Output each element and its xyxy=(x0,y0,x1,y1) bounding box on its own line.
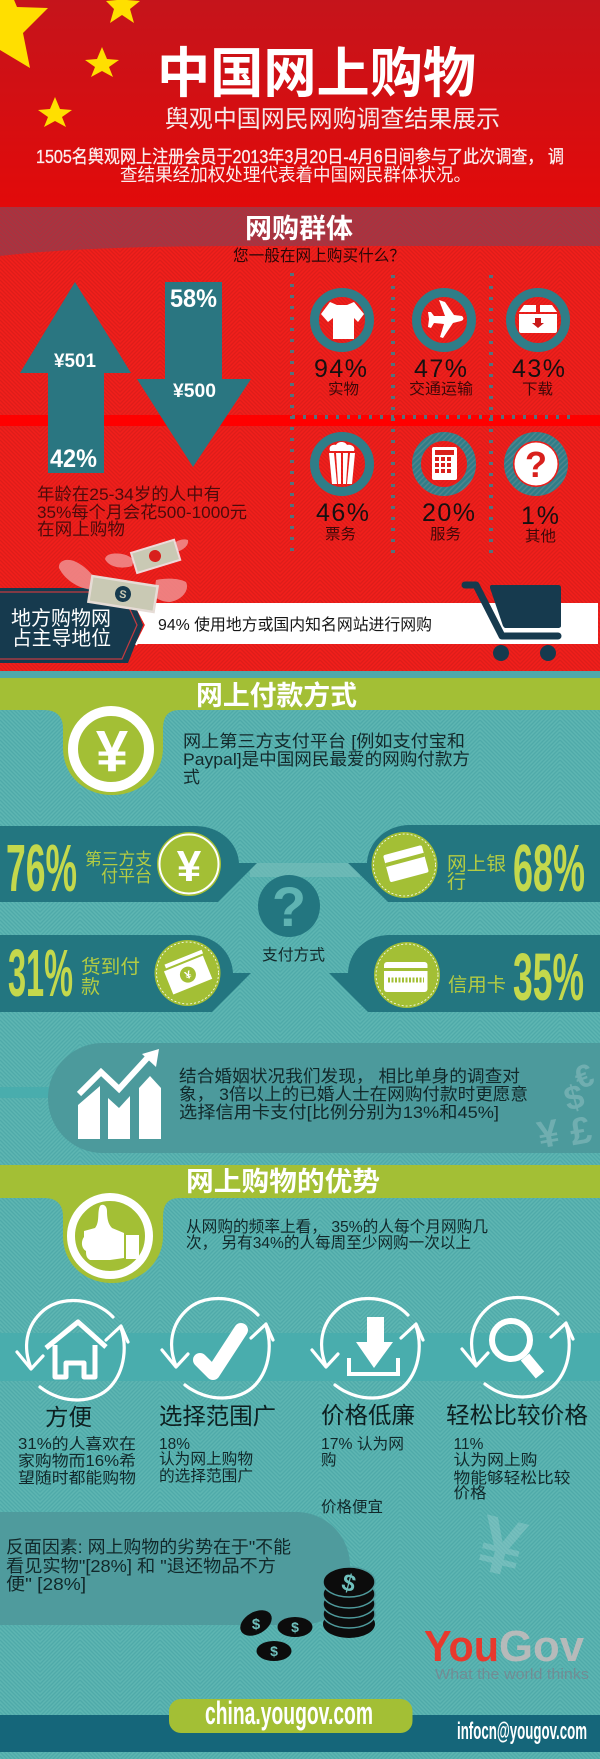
icon: flag stars xyxy=(0,0,140,127)
callout: 第三方支付平台 76%: 付平台 xyxy=(101,867,152,886)
banner: 地方购物网占主导地位: 占主导地位 xyxy=(12,627,111,650)
benefit: 轻松比较价格: 轻松比较价格 xyxy=(446,1402,588,1428)
logo: YouGov: Gov xyxy=(499,1622,585,1671)
payment intro text xyxy=(183,732,470,787)
callout: 信用卡 35%: 信用卡 xyxy=(448,974,506,996)
question text: 您一般在网上购买什么？ xyxy=(233,247,405,265)
text: frequency: 从网购的频率上看， 35%的人每个月网购几 xyxy=(186,1218,488,1236)
benefit: 轻松比较价格: 价格 xyxy=(454,1484,487,1502)
age text: 35%每个月会花500-1000元 xyxy=(37,503,247,522)
intro text: 查结果经加权处理代表着中国网民群体状况。 xyxy=(120,165,471,185)
callout: 网上银行 68%: 行 xyxy=(447,871,466,893)
white strip: 94% text: 94% 使用地方或国内知名网站进行网购 xyxy=(158,616,432,634)
age text: 在网上购物 xyxy=(37,520,125,539)
benefit: 价格低廉: 17% 认为网 xyxy=(321,1435,404,1453)
icon: large flying bill xyxy=(59,560,187,612)
item: 实物 94%: 94% xyxy=(314,355,367,383)
banner: 地方购物网占主导地位 xyxy=(0,588,146,663)
item: 下载 43%: 下载 xyxy=(522,381,553,398)
icon: loose coins xyxy=(236,1605,312,1661)
red section background xyxy=(0,207,600,671)
banner: 地方购物网占主导地位: 地方购物网 xyxy=(11,607,111,630)
panel: downside: 看见实物"[28%] 和 "退还物品不方 xyxy=(6,1556,276,1576)
section band: 网上付款方式 xyxy=(0,678,600,795)
callout: 信用卡 35% xyxy=(329,935,600,1015)
item: 其他 1%: ? xyxy=(525,444,547,485)
footer pill: china.yougov.com xyxy=(169,1695,412,1733)
item: 下载 43%: 43% xyxy=(512,355,565,383)
up arrow: ¥501 42%: ¥501 xyxy=(54,351,96,372)
callout: 货到付款 31%: 货到付 xyxy=(81,956,140,978)
item: 票务 46%: 票务 xyxy=(325,526,356,543)
icons: currency symbols: ¥ xyxy=(534,1112,562,1157)
item: 票务 46%: 46% xyxy=(316,499,369,527)
item: 交通运输 47%: 47% xyxy=(414,355,467,383)
section band: 网上购物的优势 xyxy=(0,1165,600,1283)
callout: 货到付款 31%: ¥ xyxy=(183,969,194,982)
benefit: 方便: 望随时都能购物 xyxy=(18,1469,136,1487)
icon: rising chart xyxy=(78,1049,161,1139)
text: marital: 选择信用卡支付[比例分别为13%和45%] xyxy=(179,1103,499,1122)
icon: coin stack: $ xyxy=(339,1569,359,1598)
red horizontal bar xyxy=(0,415,600,426)
teal page background xyxy=(0,671,600,1759)
item: 下载 43% xyxy=(510,292,566,398)
icon: thumbs up xyxy=(71,1197,149,1275)
label: 支付方式: 支付方式 xyxy=(262,946,325,964)
benefit: 选择范围广: 认为网上购物 xyxy=(159,1450,253,1468)
item: 实物 94%: 实物 xyxy=(328,381,359,398)
item: 其他 1% xyxy=(508,436,564,545)
icon: yen coin xyxy=(73,711,149,787)
panel: marital status xyxy=(48,1043,600,1157)
callout: 第三方支付平台 76% xyxy=(0,826,257,906)
panel: downside: 反面因素: 网上购物的劣势在于"不能 xyxy=(6,1537,291,1557)
icon: faint yen: ¥ xyxy=(469,1498,534,1595)
benefit: 价格低廉: 价格便宜 xyxy=(321,1498,383,1516)
white strip: 94% text xyxy=(135,603,598,644)
benefit: 方便: 方便 xyxy=(45,1404,92,1430)
teal divider xyxy=(0,671,600,678)
callout: 第三方支付平台 76%: ¥ xyxy=(177,842,202,891)
icons: currency symbols: $ xyxy=(560,1077,588,1119)
up arrow: ¥501 42% xyxy=(20,282,131,473)
item: 服务 20%: 服务 xyxy=(430,526,461,543)
item: 服务 20% xyxy=(416,436,475,543)
up arrow: ¥501 42%: 42% xyxy=(50,445,97,473)
item: 服务 20%: 20% xyxy=(422,499,475,527)
icon: payment question xyxy=(258,875,320,938)
heading: 网购群体: 网购群体 xyxy=(245,214,353,244)
subtitle: 舆观中国网民网购调查结果展示 xyxy=(165,106,500,133)
text: marital: 象， 3倍以上的已婚人士在网购付款时更愿意 xyxy=(179,1085,528,1104)
callout: 货到付款 31%: 款 xyxy=(81,976,100,998)
down arrow: 58% ¥500: 58% xyxy=(170,285,217,313)
text: frequency: 次， 另有34%的人每周至少网购一次以上 xyxy=(186,1234,471,1252)
payment intro text: Paypal]是中国网民最爱的网购付款方 xyxy=(183,750,470,769)
benefit: 选择范围广: 的选择范围广 xyxy=(159,1467,253,1485)
benefit: 轻松比较价格 xyxy=(446,1297,588,1502)
benefit: 轻松比较价格: 认为网上购 xyxy=(454,1451,538,1469)
header background xyxy=(0,0,600,207)
icons: currency symbols xyxy=(534,1056,599,1157)
benefit: 轻松比较价格: 11% xyxy=(454,1436,484,1453)
down arrow: 58% ¥500: ¥500 xyxy=(173,381,216,402)
age text: 年龄在25-34岁的人中有 xyxy=(37,485,221,504)
benefit: 价格低廉: 价格低廉 xyxy=(321,1402,415,1428)
footer band xyxy=(0,1715,600,1752)
item: 其他 1%: 其他 xyxy=(525,528,556,545)
logo: YouGov: What the world thinks xyxy=(435,1666,589,1683)
item: 实物 94% xyxy=(314,292,370,398)
intro text xyxy=(36,147,564,185)
benefit: 选择范围广 xyxy=(159,1298,276,1485)
icon: coin stack xyxy=(323,1567,375,1638)
item: 交通运输 47% xyxy=(409,292,474,398)
section band: 网购群体 xyxy=(0,207,600,256)
payment intro text: 网上第三方支付平台 [例如支付宝和 xyxy=(183,732,465,751)
icons: currency symbols: £ xyxy=(567,1109,595,1154)
text: marital: 结合婚姻状况我们发现， 相比单身的调查对 xyxy=(179,1067,520,1086)
icon: yen coin: ¥ xyxy=(96,719,128,784)
callout: 第三方支付平台 76%: 第三方支 xyxy=(85,850,152,869)
payment intro text: 式 xyxy=(183,768,200,787)
panel: downside xyxy=(0,1512,350,1625)
callout: 网上银行 68%: 网上银 xyxy=(447,853,506,875)
item: 其他 1%: 1% xyxy=(521,502,559,530)
callout: 货到付款 31%: 31% xyxy=(8,936,73,1011)
footer pill: china.yougov.com: china.yougov.com xyxy=(205,1695,373,1731)
benefit: 选择范围广: 选择范围广 xyxy=(159,1403,276,1429)
callout: 第三方支付平台 76%: 76% xyxy=(6,831,77,906)
dotted grid xyxy=(292,273,570,555)
stripe left of panel xyxy=(0,1087,60,1098)
icons: currency symbols: € xyxy=(569,1056,599,1096)
benefit: 方便: 家购物而16%希 xyxy=(18,1452,136,1470)
callout: 网上银行 68% xyxy=(348,825,600,906)
section band: 网上购物的优势: 网上购物的优势 xyxy=(186,1167,380,1197)
lighter teal stripe xyxy=(0,1333,600,1381)
benefit: 价格低廉 xyxy=(312,1298,423,1516)
item: 票务 46% xyxy=(314,436,370,543)
benefit: 价格低廉: 购 xyxy=(321,1451,337,1469)
panel: downside: 便" [28%] xyxy=(6,1574,86,1594)
benefit: 轻松比较价格: 物能够轻松比较 xyxy=(454,1469,570,1487)
section band: 网上付款方式: 网上付款方式 xyxy=(196,680,357,711)
text: marital xyxy=(179,1067,528,1122)
age text xyxy=(37,485,247,539)
callout: 货到付款 31% xyxy=(0,935,251,1012)
benefit: 方便 xyxy=(17,1300,136,1487)
icon: loose coins: $ xyxy=(270,1643,278,1659)
faint connector between callouts xyxy=(250,863,360,877)
logo: YouGov xyxy=(424,1622,589,1683)
icon: loose coins: $ xyxy=(291,1619,299,1635)
icon: shopping cart xyxy=(465,585,561,661)
benefit: 方便: 31%的人喜欢在 xyxy=(18,1435,136,1453)
icon: loose coins: $ xyxy=(252,1616,261,1633)
benefit: 选择范围广: 18% xyxy=(159,1436,190,1453)
icon: small flying bill xyxy=(105,539,188,573)
logo: YouGov: You xyxy=(424,1622,499,1671)
icon: payment question: ? xyxy=(272,875,306,938)
title: 中国网上购物 xyxy=(157,44,476,104)
down arrow: 58% ¥500 xyxy=(137,282,251,467)
text: frequency xyxy=(186,1218,488,1252)
icon: large flying bill: S xyxy=(118,588,127,601)
item: 交通运输 47%: 交通运输 xyxy=(409,380,474,398)
